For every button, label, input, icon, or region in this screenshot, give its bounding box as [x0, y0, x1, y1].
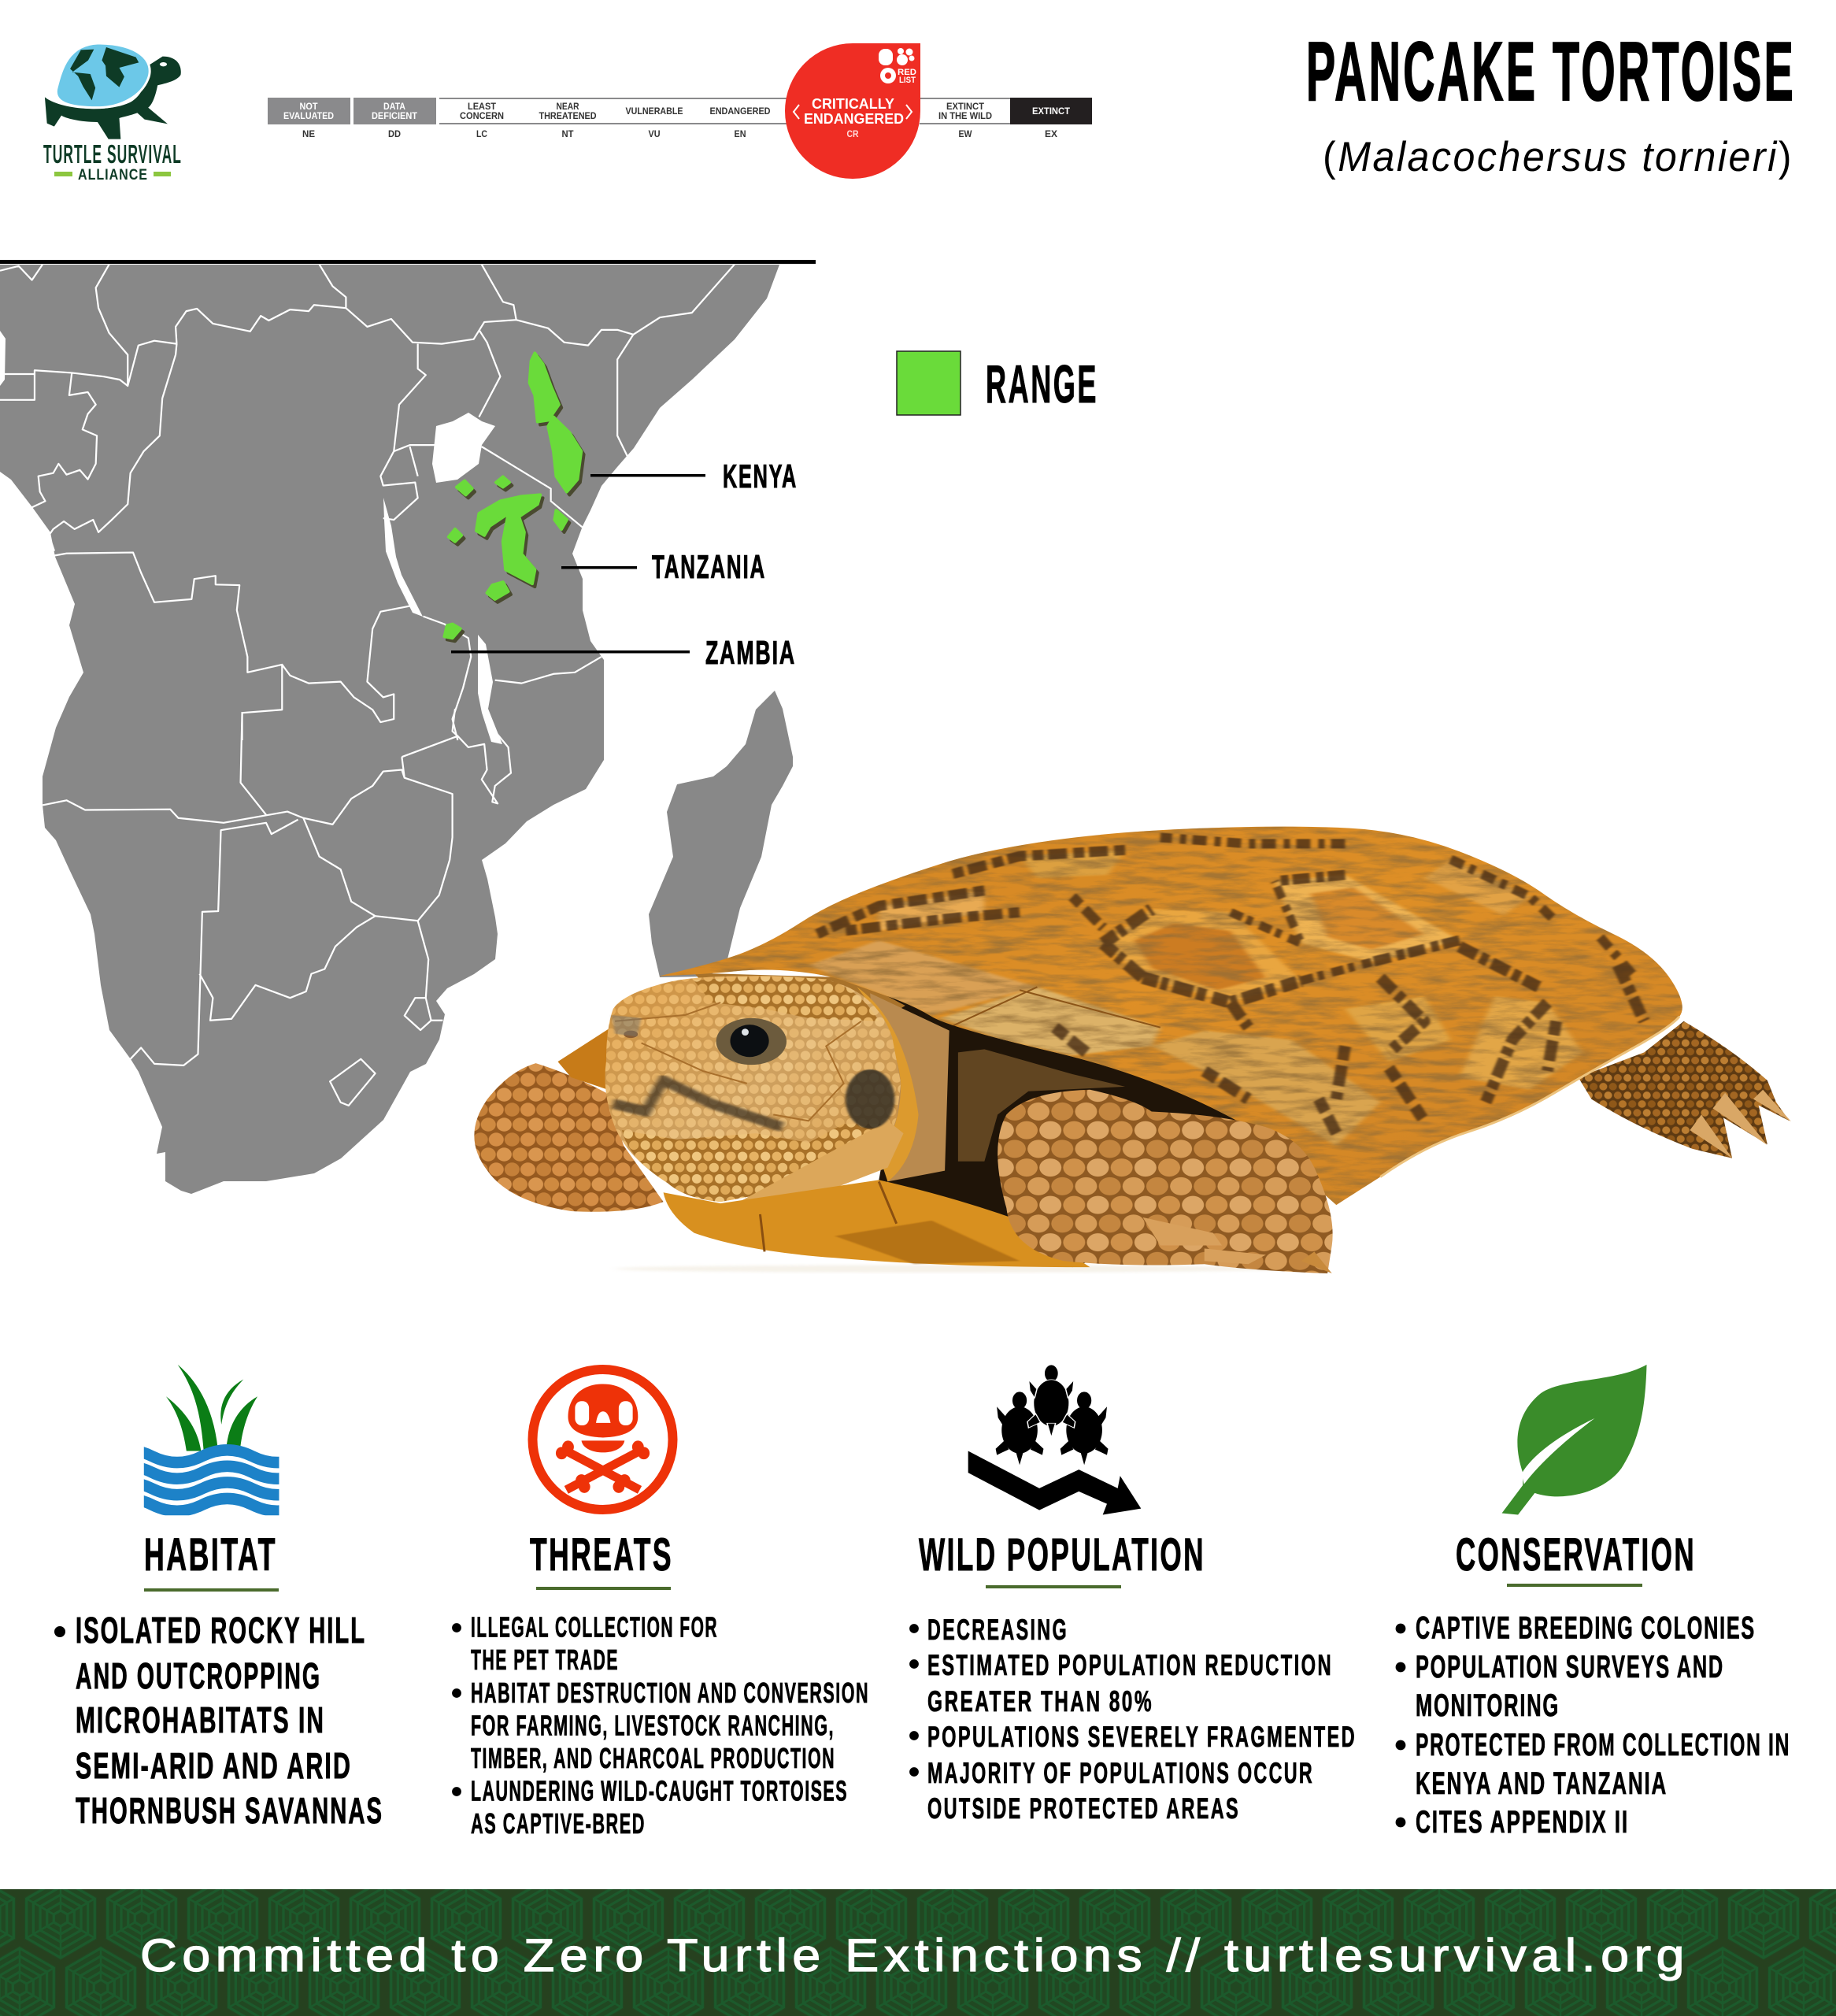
IUCN red list status bar: EX — [1045, 128, 1057, 139]
IUCN red list status bar: NT — [562, 128, 574, 139]
wild population text — [910, 1614, 1357, 1825]
critically endangered badge: RED — [898, 68, 916, 77]
icon: grass and water — [143, 1365, 279, 1515]
legend: range: RANGE — [986, 354, 1098, 414]
habitat text: ISOLATED ROCKY HILL — [76, 1610, 366, 1651]
threats text: ILLEGAL COLLECTION FOR — [471, 1611, 718, 1643]
IUCN red list status bar: EVALUATED — [283, 110, 334, 121]
threats text: TIMBER, AND CHARCOAL PRODUCTION — [471, 1742, 835, 1774]
wild population text: OUTSIDE PROTECTED AREAS — [927, 1792, 1240, 1825]
wild population text: MAJORITY OF POPULATIONS OCCUR — [927, 1757, 1314, 1789]
habitat text: THORNBUSH SAVANNAS — [76, 1790, 383, 1831]
IUCN red list status bar: LEAST — [468, 101, 497, 112]
IUCN red list status bar: EN — [734, 128, 746, 139]
conservation text: MONITORING — [1416, 1688, 1560, 1723]
soft ground shadow — [615, 1265, 1283, 1273]
IUCN red list status bar: EXTINCT — [946, 101, 985, 112]
wild population text: GREATER THAN 80% — [927, 1685, 1153, 1718]
threats text: LAUNDERING WILD-CAUGHT TORTOISES — [471, 1775, 848, 1807]
threats text: THE PET TRADE — [471, 1644, 619, 1676]
habitat text: MICROHABITATS IN — [76, 1699, 325, 1740]
label: Kenya — [590, 458, 798, 495]
threats text: AS CAPTIVE-BRED — [471, 1807, 646, 1840]
heading: habitat: HABITAT — [144, 1529, 277, 1581]
habitat text: AND OUTCROPPING — [76, 1655, 321, 1696]
IUCN red list status bar: VULNERABLE — [625, 106, 683, 117]
tortoise range polygons — [444, 354, 584, 641]
top rule — [0, 260, 816, 264]
panel: wild population — [910, 1365, 1357, 1825]
backing behind head top — [694, 973, 905, 1028]
habitat text — [55, 1610, 383, 1831]
neck collar and flap — [857, 987, 919, 1181]
panel: threats — [452, 1369, 869, 1840]
label: Kenya: KENYA — [723, 458, 798, 495]
carapace — [632, 819, 1715, 1208]
heading: threats: THREATS — [530, 1529, 673, 1581]
borders south — [43, 709, 511, 1106]
IUCN red list status bar: VU — [649, 128, 660, 139]
tortoise illustration — [474, 819, 1791, 1273]
front far foot — [474, 1063, 664, 1212]
habitat text: SEMI-ARID AND ARID — [76, 1745, 352, 1786]
critically endangered badge: ENDANGERED — [804, 111, 904, 127]
critically endangered badge: CR — [847, 128, 859, 139]
threats text — [452, 1611, 869, 1840]
critically endangered badge: LIST — [899, 76, 916, 85]
threats text: FOR FARMING, LIVESTOCK RANCHING, — [471, 1709, 835, 1742]
panel: conservation — [1396, 1365, 1790, 1840]
dark shell interior — [870, 990, 1336, 1267]
head — [605, 976, 904, 1205]
neck skin — [870, 993, 949, 1181]
logo: Turtle Survival Alliance: ALLIANCE — [78, 167, 148, 183]
IUCN red list status bar: CONCERN — [460, 110, 504, 121]
Madagascar — [649, 691, 793, 977]
conservation text: KENYA AND TANZANIA — [1416, 1766, 1668, 1801]
label: Zambia — [451, 634, 796, 671]
dark scute seams — [817, 837, 1644, 1133]
label: Tanzania: TANZANIA — [652, 548, 766, 585]
conservation text — [1396, 1611, 1790, 1840]
label: Zambia: ZAMBIA — [705, 634, 796, 671]
IUCN red list status bar: NOT — [299, 101, 318, 112]
rear leg — [1579, 1021, 1791, 1158]
front near limb — [998, 1090, 1333, 1273]
IUCN red list status bar: DATA — [383, 101, 405, 112]
IUCN red list status bar: EW — [959, 128, 972, 139]
label: Tanzania — [561, 548, 766, 585]
range map of southern and eastern Africa — [0, 260, 816, 1194]
panel: habitat — [55, 1365, 383, 1831]
IUCN red list status bar: LC — [476, 128, 487, 139]
IUCN red list status bar — [268, 43, 1092, 179]
wild population text: DECREASING — [927, 1614, 1068, 1646]
IUCN red list status bar: DD — [388, 128, 401, 139]
IUCN red list status bar: NEAR — [556, 101, 579, 112]
IUCN red list status bar: NE — [302, 128, 315, 139]
logo: Turtle Survival Alliance: TURTLE SURVIVAL — [43, 139, 182, 169]
lakes — [383, 413, 502, 744]
logo: Turtle Survival Alliance — [43, 43, 182, 183]
wild population text: POPULATIONS SEVERELY FRAGMENTED — [927, 1721, 1357, 1753]
critically endangered badge — [785, 43, 920, 179]
pale scutes — [809, 850, 1582, 1146]
conservation text: CITES APPENDIX II — [1416, 1805, 1629, 1840]
IUCN red list status bar: DEFICIENT — [372, 110, 418, 121]
legend: range — [897, 351, 1098, 415]
IUCN red list status bar: EXTINCT — [1032, 106, 1071, 117]
wild population text: ESTIMATED POPULATION REDUCTION — [927, 1649, 1333, 1681]
icon: turtles over falling arrow — [968, 1365, 1141, 1515]
IUCN red list status bar: ENDANGERED — [710, 106, 771, 117]
critically endangered badge: CRITICALLY — [812, 96, 894, 112]
threats text: HABITAT DESTRUCTION AND CONVERSION — [471, 1677, 869, 1709]
IUCN red list status bar: THREATENED — [539, 110, 597, 121]
footer banner — [0, 1889, 1836, 2016]
icon: leaf — [1502, 1365, 1647, 1515]
footer banner: Committed to Zero Turtle Extinctions // turtlesurvival.org — [140, 1930, 1690, 1981]
heading: wild population: WILD POPULATION — [919, 1529, 1205, 1581]
scientific name: (Malacochersus tornieri) — [1323, 134, 1793, 180]
borders north — [0, 265, 735, 740]
icon: skull and crossbones — [532, 1369, 672, 1510]
plastron — [664, 1180, 1090, 1267]
IUCN red list status bar: IN THE WILD — [938, 110, 992, 121]
